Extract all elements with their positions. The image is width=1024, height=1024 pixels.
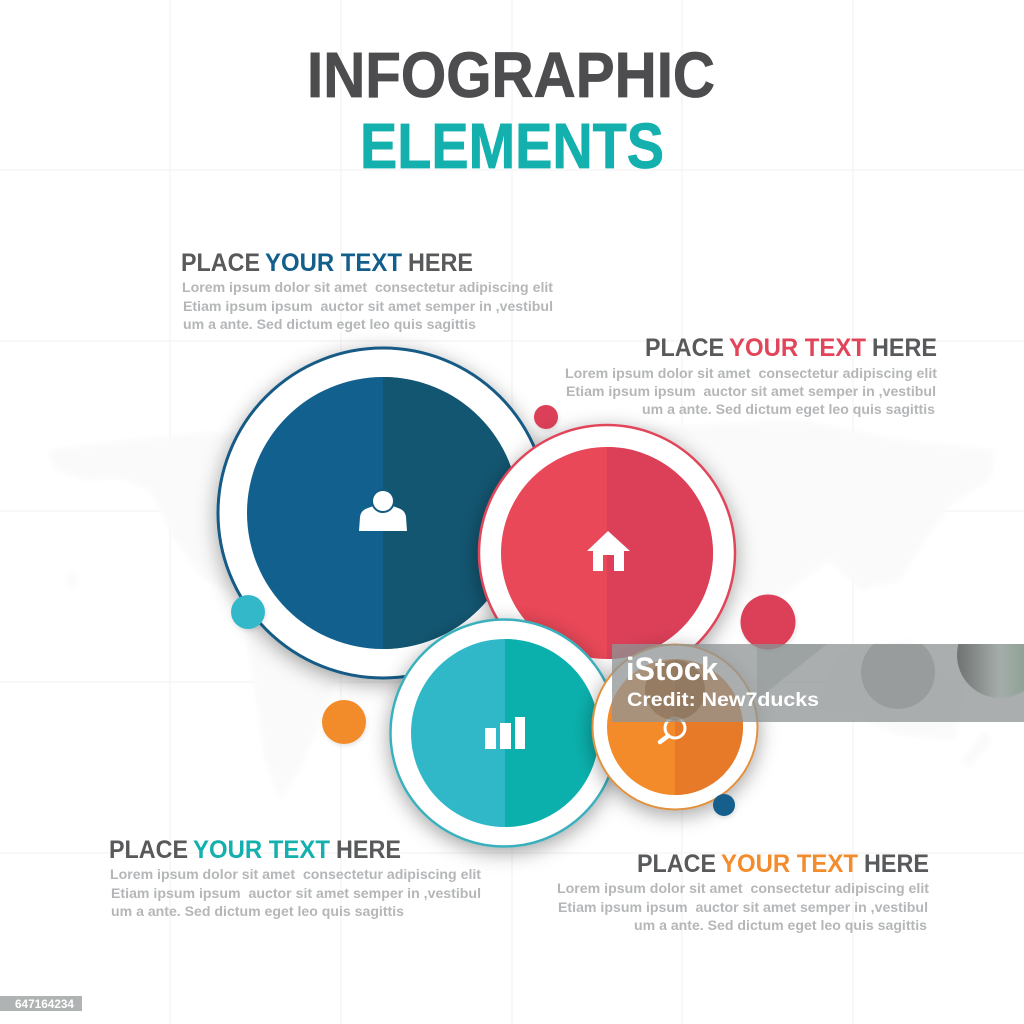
circle: red bbox=[479, 425, 735, 681]
dot: teal bbox=[231, 595, 265, 629]
heading: red: PLACE bbox=[645, 334, 724, 362]
text block: top left bbox=[181, 249, 553, 332]
heading: blue bbox=[181, 249, 473, 277]
dot: orange bbox=[322, 700, 366, 744]
heading: teal bbox=[109, 836, 401, 864]
text block: top right bbox=[565, 334, 937, 417]
watermark brand: iStock bbox=[626, 651, 718, 687]
body text: orange bbox=[557, 880, 929, 933]
icon: magnifier bbox=[660, 718, 685, 742]
watermark credit: Credit: New7ducks bbox=[627, 690, 819, 711]
heading: blue: YOUR TEXT bbox=[265, 249, 402, 277]
body text: teal bbox=[110, 866, 481, 919]
body text: orange: Etiam ipsum ipsum auctor sit amet semper in ,vestibul bbox=[558, 899, 928, 915]
dot: large red bbox=[740, 594, 796, 650]
body text: teal: um a ante. Sed dictum eget leo quis sagittis bbox=[111, 903, 404, 919]
circle: blue bbox=[218, 348, 548, 678]
heading: orange: YOUR TEXT bbox=[721, 850, 858, 878]
circle: teal bbox=[390, 620, 618, 846]
background world map bbox=[48, 420, 995, 800]
body text: red: um a ante. Sed dictum eget leo quis sagittis bbox=[642, 401, 935, 417]
watermark band bbox=[612, 644, 1024, 722]
title bbox=[307, 39, 715, 182]
body text: teal: Lorem ipsum dolor sit amet consectetur adipiscing elit bbox=[110, 866, 481, 882]
body text: blue: Etiam ipsum ipsum auctor sit amet semper in ,vestibul bbox=[183, 298, 553, 314]
heading: teal: PLACE bbox=[109, 836, 188, 864]
body text: blue bbox=[182, 279, 553, 332]
dot: small red bbox=[534, 405, 558, 429]
title line: elements: ELEMENTS bbox=[360, 110, 664, 182]
body text: red: Etiam ipsum ipsum auctor sit amet semper in ,vestibul bbox=[566, 383, 936, 399]
heading: teal: YOUR TEXT bbox=[193, 836, 330, 864]
body text: orange: Lorem ipsum dolor sit amet consectetur adipiscing elit bbox=[557, 880, 929, 896]
heading: orange: PLACE bbox=[637, 850, 716, 878]
icon: house bbox=[587, 531, 630, 571]
dot: small blue bbox=[713, 794, 735, 816]
image id badge bbox=[0, 996, 82, 1011]
title line: infographic: INFOGRAPHIC bbox=[307, 39, 715, 111]
heading: red: HERE bbox=[872, 334, 937, 362]
text block: bottom left bbox=[109, 836, 481, 919]
body text: blue: um a ante. Sed dictum eget leo quis sagittis bbox=[183, 316, 476, 332]
heading: orange: HERE bbox=[864, 850, 929, 878]
heading: blue: HERE bbox=[408, 249, 473, 277]
image id badge: 647164234 bbox=[15, 997, 74, 1011]
heading: red: YOUR TEXT bbox=[729, 334, 866, 362]
text block: bottom right bbox=[557, 850, 929, 933]
heading: blue: PLACE bbox=[181, 249, 260, 277]
body text: blue: Lorem ipsum dolor sit amet consectetur adipiscing elit bbox=[182, 279, 553, 295]
body text: red bbox=[565, 365, 937, 417]
heading: red bbox=[645, 334, 937, 362]
body text: orange: um a ante. Sed dictum eget leo quis sagittis bbox=[634, 917, 927, 933]
icon: bar chart bbox=[485, 717, 525, 749]
icon: person bbox=[359, 489, 407, 531]
body text: red: Lorem ipsum dolor sit amet consectetur adipiscing elit bbox=[565, 365, 937, 381]
body text: teal: Etiam ipsum ipsum auctor sit amet semper in ,vestibul bbox=[111, 885, 481, 901]
heading: teal: HERE bbox=[336, 836, 401, 864]
heading: orange bbox=[637, 850, 929, 878]
watermark ghost shapes bbox=[645, 644, 1024, 720]
circle: orange bbox=[592, 644, 758, 810]
